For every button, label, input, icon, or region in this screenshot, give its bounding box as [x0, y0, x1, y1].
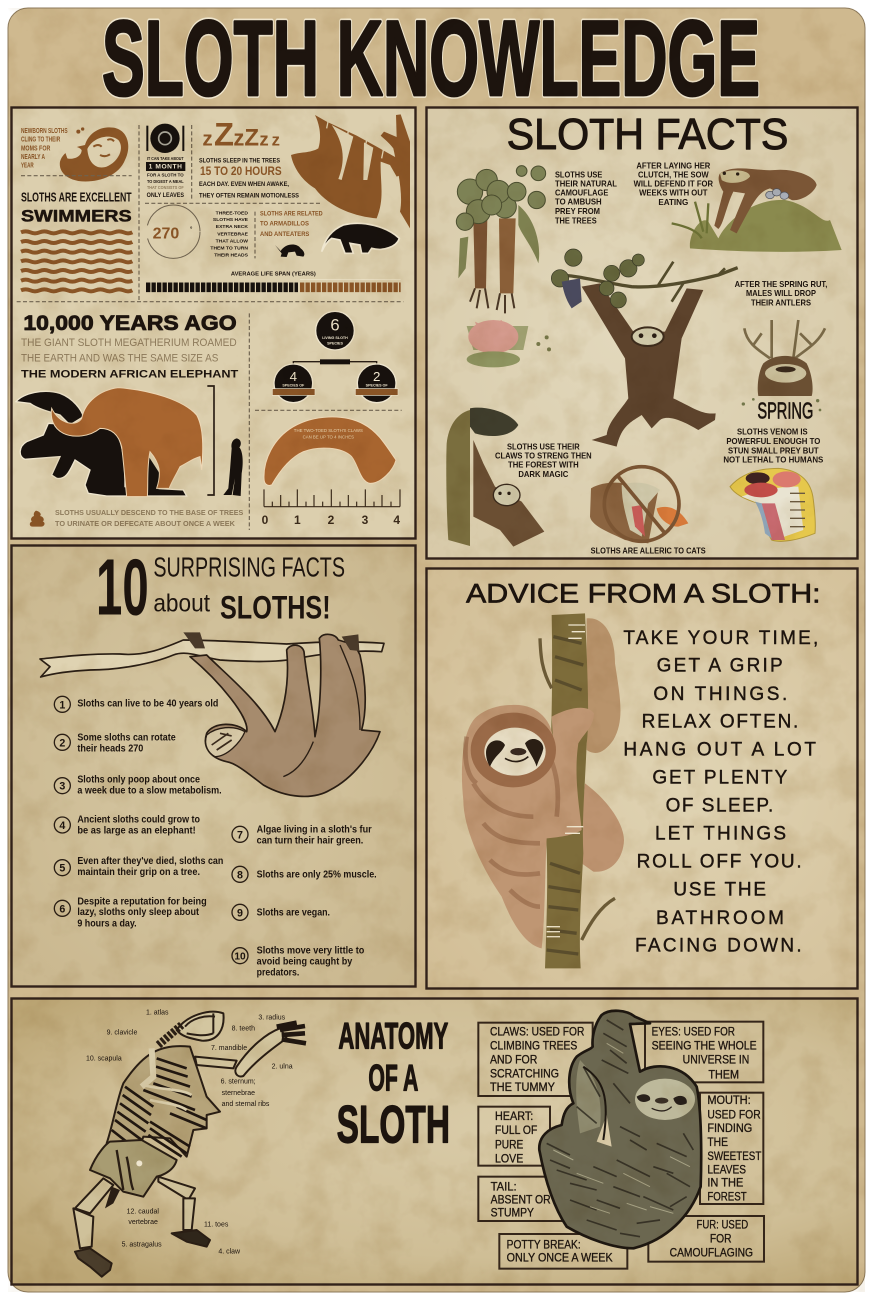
icon: anteater: [322, 223, 399, 253]
callout: eyes: SEEING THE WHOLE: [652, 1040, 757, 1053]
heading: zzzzzz sleep: z: [272, 131, 280, 150]
callout: heart: HEART:: [495, 1110, 533, 1123]
heading: anatomy of a sloth: [337, 1015, 450, 1155]
heading: 10 surprising facts about sloths: SLOTHS!: [220, 589, 331, 625]
skull: [177, 1012, 224, 1041]
fact 1: 1: [59, 699, 65, 711]
fact 7: can turn their hair green.: [257, 835, 364, 846]
illustration: sloth skeleton: [73, 1012, 306, 1277]
text: skeleton labels: vertebrae: [128, 1219, 158, 1226]
stat: 1 month: [146, 156, 185, 199]
species: six living: 6: [330, 316, 340, 335]
text: megatherium description: THE MODERN AFRICAN ELEPHANT: [21, 369, 238, 381]
species tree: [272, 311, 398, 403]
callout: mouth: LEAVES: [707, 1163, 746, 1176]
fact 2: their heads 270: [77, 744, 144, 755]
text: three-toed vertebrae: SLOTHS HAVE: [213, 217, 249, 223]
ruler scale: 1: [294, 513, 301, 527]
text: advice lines: FACING DOWN.: [635, 936, 802, 957]
callout: tail: STUMPY: [491, 1207, 534, 1220]
fact 5: 5: [59, 863, 65, 875]
text: sleep hours: [199, 158, 299, 199]
ruler scale: 2: [328, 513, 335, 527]
text: advice lines: RELAX OFTEN.: [642, 712, 798, 733]
heading: zzzzzz sleep: Z: [244, 125, 259, 152]
stat: 1 month: IT CAN TAKE ABOUT: [147, 156, 184, 161]
stat: 1 month: THAT CONSISTS OF: [147, 185, 184, 190]
fact 4: 4: [59, 820, 65, 832]
icon: poop: [30, 511, 45, 527]
fact 5: maintain their grip on a tree.: [77, 867, 200, 878]
fact 8: 8: [237, 869, 243, 881]
species: four: SPECIES OF: [282, 383, 305, 387]
text: skeleton labels: 6. sternum;: [221, 1078, 256, 1085]
text: newborn sloths: NEARLY A: [21, 154, 45, 161]
text: newborn sloths: YEAR: [21, 163, 34, 170]
text: skeleton labels: 4. claw: [218, 1248, 241, 1255]
heading: 10,000 years ago: 10,000 YEARS AGO: [23, 312, 237, 335]
text: skeleton labels: 9. clavicle: [107, 1030, 137, 1037]
stat: 1 month: 1 MONTH: [149, 164, 182, 171]
ruler scale: 3: [362, 513, 369, 527]
text: venom: POWERFUL ENOUGH TO: [726, 436, 821, 446]
callout: tail: [491, 1181, 551, 1220]
stat: 270 degree head rotation: 270: [153, 225, 179, 242]
text: advice lines: GET PLENTY: [652, 767, 788, 788]
illustration: sloth camouflaged as plant: [456, 166, 546, 313]
text: clutch: [634, 160, 713, 207]
fact 3: 3: [59, 781, 65, 793]
fact 1: Sloths can live to be 40 years old: [77, 699, 218, 710]
heading: advice from a sloth: ADVICE FROM A SLOTH:: [466, 578, 821, 608]
text: advice lines: [623, 628, 818, 957]
callout: fur: [670, 1218, 753, 1260]
text: three-toed vertebrae: EXTRA NECK: [216, 224, 248, 230]
text: advice lines: USE THE: [673, 880, 766, 901]
callout: mouth: MOUTH:: [707, 1094, 751, 1107]
illustration: branch: [40, 640, 384, 677]
heading: sloths are excellent swimmers: SLOTHS ARE EXCELLENT: [21, 191, 132, 205]
heading: anatomy of a sloth: OF A: [368, 1058, 418, 1099]
fact 6: lazy, sloths only sleep about: [77, 907, 200, 918]
text: three-toed vertebrae: THEM TO TURN: [210, 245, 248, 251]
text: camouflage: THEIR NATURAL: [555, 179, 617, 189]
callout: potty break: ONLY ONCE A WEEK: [507, 1252, 613, 1265]
text: claws dark magic: DARK MAGIC: [518, 469, 568, 479]
fact 2: Some sloths can rotate: [77, 733, 176, 744]
fact 10: avoid being caught by: [257, 956, 353, 967]
top section of statistics: [17, 114, 410, 302]
callout: mouth: THE: [707, 1136, 728, 1149]
text: newborn sloths: [21, 128, 68, 170]
fact 6: 9 hours a day.: [77, 919, 137, 930]
fact 7: 7: [237, 829, 243, 841]
callout: claws: CLAWS: USED FOR: [490, 1026, 584, 1039]
life span bar: AVERAGE LIFE SPAN (YEARS): [231, 272, 316, 278]
text: three-toed vertebrae: THAT ALLOW: [216, 238, 248, 244]
text: allergic to cats: SLOTHS ARE ALLERIC TO CATS: [591, 545, 706, 555]
icon: armadillo: [275, 244, 304, 257]
text: skeleton labels: 8. teeth: [232, 1026, 255, 1033]
fact 10: Sloths move very little to: [257, 945, 364, 956]
species: two: 2: [373, 369, 380, 384]
text: claws dark magic: [495, 441, 592, 479]
text: sloths descend: SLOTHS USUALLY DESCEND TO THE BASE OF TREES: [55, 508, 243, 517]
callout: mouth: SWEETEST: [707, 1150, 761, 1163]
text: antlers: MALES WILL DROP: [746, 288, 816, 298]
text: advice lines: HANG OUT A LOT: [623, 740, 816, 761]
callout: claws: CLIMBING TREES: [490, 1040, 578, 1053]
heading: spring: SPRING: [757, 398, 813, 424]
hind limbs: [75, 1178, 113, 1213]
fact 9: 9: [237, 907, 243, 919]
stat: 270 degree head rotation: [147, 205, 200, 258]
callout: fur: FUR: USED: [696, 1218, 748, 1231]
callout: heart: LOVE: [495, 1152, 524, 1165]
text: skeleton labels: 3. radius: [258, 1014, 286, 1021]
fact 3: a week due to a slow metabolism.: [77, 785, 222, 796]
heading: spring: [742, 398, 821, 424]
illustration: sloth climbing tree: [462, 613, 624, 968]
fact 1: [54, 696, 218, 712]
text: megatherium description: [21, 337, 238, 381]
icon: human silhouette: [223, 438, 243, 496]
text: three-toed vertebrae: VERTEBRAE: [217, 231, 249, 237]
heading: zzzzzz sleep: [202, 116, 280, 153]
text: camouflage: CAMOUFLAGE: [555, 188, 609, 198]
text: venom: STUN SMALL PREY BUT: [728, 445, 819, 455]
text: newborn sloths: CLING TO THEIR: [21, 137, 60, 144]
stat: 270 degree head rotation: °: [190, 227, 193, 233]
fact 6: [54, 896, 207, 930]
callout: claws: [490, 1026, 584, 1094]
panel: sloth facts: [426, 108, 858, 558]
text: advice lines: TAKE YOUR TIME,: [623, 628, 818, 649]
callout: mouth: FOREST: [707, 1191, 747, 1204]
fact 10: [232, 945, 364, 979]
icon: sloth claw arch: [264, 417, 396, 485]
text: advice lines: ROLL OFF YOU.: [637, 852, 802, 873]
text: sleep hours: EACH DAY. EVEN WHEN AWAKE,: [199, 182, 289, 188]
text: related to armadillos and anteaters: SLOTHS ARE RELATED: [260, 211, 323, 217]
text: newborn sloths: NEWBORN SLOTHS: [21, 128, 68, 135]
panel: advice from a sloth: [426, 568, 858, 988]
illustration: pink creature in nest: [467, 320, 551, 367]
text: camouflage: SLOTHS USE: [555, 169, 603, 179]
callout: mouth: FINDING: [707, 1122, 752, 1135]
text: skeleton labels: 11. toes: [204, 1222, 229, 1229]
species: four: [272, 364, 315, 403]
icon: hanging sloth silhouettes: [291, 114, 410, 228]
text: sloths descend: [55, 508, 243, 528]
stat: 1 month: TO DIGEST A MEAL: [147, 179, 184, 184]
species: six living: [316, 311, 354, 350]
callout: tail: ABSENT OR: [491, 1194, 551, 1207]
text: advice lines: BATHROOM: [656, 908, 784, 929]
fact 5: [54, 856, 223, 878]
fact 6: 6: [59, 903, 65, 915]
heading: zzzzzz sleep: z: [259, 129, 269, 150]
ruler scale: 0: [262, 513, 269, 527]
pelvis: [90, 1140, 177, 1197]
heading: 10 surprising facts about sloths: SURPRISING FACTS: [153, 552, 345, 583]
text: antlers: [735, 279, 827, 307]
heading: sloth facts: SLOTH FACTS: [507, 110, 788, 159]
fact 5: Even after they've died, sloths can: [77, 856, 223, 867]
ruler scale: 4: [393, 513, 400, 527]
fact 10: 10: [234, 951, 246, 962]
text: clutch: AFTER LAYING HER: [636, 160, 710, 170]
callout: mouth: IN THE: [707, 1177, 744, 1190]
icon: wavy water stripes: [21, 231, 132, 291]
text: skeleton labels: 7. mandible: [211, 1045, 247, 1052]
fact 10: predators.: [257, 968, 300, 979]
callout: fur: CAMOUFLAGING: [670, 1247, 753, 1260]
text: related to armadillos and anteaters: TO ARMADILLOS: [260, 222, 309, 228]
heading: sloths are excellent swimmers: [21, 191, 132, 226]
fact 7: [232, 824, 372, 846]
callout: eyes: THEM: [708, 1068, 739, 1081]
callout: fur: FOR: [710, 1232, 731, 1245]
heading: sloths are excellent swimmers: SWIMMERS: [21, 207, 132, 226]
lower section: giant sloth and species: [16, 311, 402, 530]
fact 9: Sloths are vegan.: [257, 908, 330, 919]
heading: anatomy of a sloth: SLOTH: [337, 1096, 450, 1155]
text: sleep hours: SLOTHS SLEEP IN THE TREES: [199, 158, 280, 164]
text: camouflage: THE TREES: [555, 215, 597, 225]
text: three-toed vertebrae: THEIR HEADS: [214, 253, 249, 259]
text: skeleton labels: sternebrae: [222, 1090, 255, 1097]
fact 8: Sloths are only 25% muscle.: [257, 869, 377, 880]
fact list left: [54, 696, 377, 979]
text: advice lines: LET THINGS: [655, 823, 786, 844]
text: advice lines: OF SLEEP.: [666, 796, 773, 817]
heading: zzzzzz sleep: Z: [214, 116, 234, 153]
fact 4: be as large as an elephant!: [77, 825, 196, 836]
text: claws dark magic: THE FOREST WITH: [508, 460, 579, 470]
callout: claws: THE TUMMY: [490, 1081, 555, 1094]
stat: 1 month: ONLY LEAVES: [147, 193, 184, 199]
illustration: sloth with antlers: [744, 320, 825, 396]
callout: claws: AND FOR: [490, 1054, 537, 1067]
fact 8: [232, 866, 377, 882]
illustration: sloth allergic to cats: [590, 467, 688, 543]
heading: zzzzzz sleep: z: [202, 128, 213, 151]
callout: claws: SCRATCHING: [490, 1067, 559, 1080]
text: clutch: CLUTCH, THE SOW: [638, 170, 709, 180]
callout: eyes: EYES: USED FOR: [652, 1026, 735, 1039]
fore limb: [195, 1057, 237, 1068]
text: callouts: [490, 1026, 761, 1265]
species: two: [355, 364, 398, 403]
callout: heart: PURE: [495, 1138, 524, 1151]
text: antlers: AFTER THE SPRING RUT,: [735, 279, 827, 289]
text: venom: SLOTHS VENOM IS: [737, 427, 808, 437]
text: clutch: WEEKS WITH OUT: [639, 188, 707, 198]
text: related to armadillos and anteaters: [260, 211, 323, 238]
illustration: sloth guarding eggs on a hill: [672, 168, 842, 252]
stat: 1 month: FOR A SLOTH TO: [147, 173, 184, 178]
callout: mouth: [707, 1094, 761, 1204]
fact 7: Algae living in a sloth's fur: [257, 824, 372, 835]
text: newborn sloths: MOMS FOR: [21, 145, 50, 152]
callout: eyes: [652, 1026, 757, 1081]
text: venom: [723, 427, 824, 464]
ribcage: [107, 1046, 220, 1157]
text: three-toed vertebrae: THREE-TOED: [216, 210, 248, 216]
text: camouflage: PREY FROM: [555, 206, 600, 216]
icon: elephant silhouette: [51, 388, 203, 497]
text: skeleton labels: and sternal ribs: [222, 1101, 270, 1108]
fact 4: [54, 814, 200, 836]
text: advice lines: ON THINGS.: [653, 684, 787, 705]
callout: potty break: POTTY BREAK:: [507, 1238, 581, 1251]
species: four: 4: [290, 369, 298, 384]
height bracket: [207, 386, 214, 495]
text: sleep hours: THEY OFTEN REMAIN MOTIONLESS: [199, 193, 299, 199]
icon: sloth claw arch: CAN BE UP TO 4 INCHES: [303, 435, 354, 440]
illustration: three-toed sloth: [539, 1011, 701, 1248]
species: six living: LIVING SLOTH: [322, 336, 348, 340]
heading: 10 surprising facts about sloths: [96, 542, 345, 631]
illustration: sloth hanging from branch: [551, 249, 738, 447]
icon: mother and baby sloth: [60, 127, 128, 181]
ruler scale: [262, 489, 400, 527]
panel: anatomy of a sloth: [12, 998, 858, 1284]
text: megatherium description: THE EARTH AND WAS THE SAME SIZE AS: [21, 353, 218, 365]
text: related to armadillos and anteaters: AND ANTEATERS: [260, 232, 309, 238]
text: skeleton labels: 5. astragalus: [122, 1242, 162, 1249]
text: skeleton labels: [86, 1010, 293, 1255]
fact 3: Sloths only poop about once: [77, 774, 200, 785]
text: skeleton labels: 12. caudal: [127, 1208, 159, 1215]
callout: heart: [495, 1110, 537, 1165]
fact 2: 2: [59, 737, 65, 749]
text: sleep hours: 15 TO 20 HOURS: [200, 165, 282, 178]
heading: 10 surprising facts about sloths: about: [153, 590, 210, 618]
callout: mouth: USED FOR: [707, 1108, 761, 1121]
text: clutch: EATING: [658, 197, 688, 207]
species: two: SPECIES OF: [366, 383, 388, 387]
icon: plate of leaves: [146, 124, 184, 153]
fact 4: Ancient sloths could grow to: [77, 814, 200, 825]
callout: tail: TAIL:: [491, 1181, 517, 1194]
icon: sloth claw arch: THE TWO-TOED SLOTH'S CLAWS: [294, 428, 363, 433]
illustration: sloth on tree with dark magic: [446, 408, 544, 547]
text: claws dark magic: SLOTHS USE THEIR: [507, 441, 580, 451]
text: skeleton labels: 10. scapula: [86, 1055, 122, 1062]
text: camouflage: TO AMBUSH: [555, 197, 602, 207]
fact 6: Despite a reputation for being: [77, 896, 207, 907]
heading: zzzzzz sleep: z: [233, 126, 244, 151]
text: claws dark magic: CLAWS TO STRENG THEN: [495, 451, 592, 461]
species: six living: SPECIES: [327, 341, 343, 345]
icon: giant sloth silhouette: [16, 391, 187, 496]
callout: eyes: UNIVERSE IN: [683, 1054, 749, 1067]
callout: potty break: [507, 1238, 613, 1265]
text: skeleton labels: 2. ulna: [272, 1063, 293, 1070]
text: clutch: WILL DEFEND IT FOR: [634, 179, 713, 189]
fact 9: [232, 904, 330, 920]
heading: 10 surprising facts about sloths: 10: [96, 542, 149, 631]
callout: heart: FULL OF: [495, 1124, 537, 1137]
text: skeleton labels: 1. atlas: [146, 1010, 169, 1017]
text: camouflage: [555, 169, 617, 225]
text: advice lines: GET A GRIP: [657, 656, 783, 677]
callout boxes: [478, 1022, 764, 1269]
text: three-toed vertebrae: [210, 210, 249, 259]
illustration: hanging sloth: [183, 632, 380, 796]
fact 2: [54, 733, 176, 755]
text: venom: NOT LETHAL TO HUMANS: [723, 454, 824, 464]
text: antlers: THEIR ANTLERS: [751, 297, 811, 307]
text: megatherium description: THE GIANT SLOTH MEGATHERIUM ROAMED: [21, 337, 237, 349]
heading: anatomy of a sloth: ANATOMY: [338, 1015, 448, 1056]
fact 3: [54, 774, 222, 796]
panel: infographic of sloth statistics: [12, 108, 416, 538]
text: sloths descend: TO URINATE OR DEFECATE ABOUT ONCE A WEEK: [55, 519, 236, 528]
panel: 10 surprising facts: [12, 542, 416, 986]
illustration: sloth head anatomy: [730, 468, 815, 541]
